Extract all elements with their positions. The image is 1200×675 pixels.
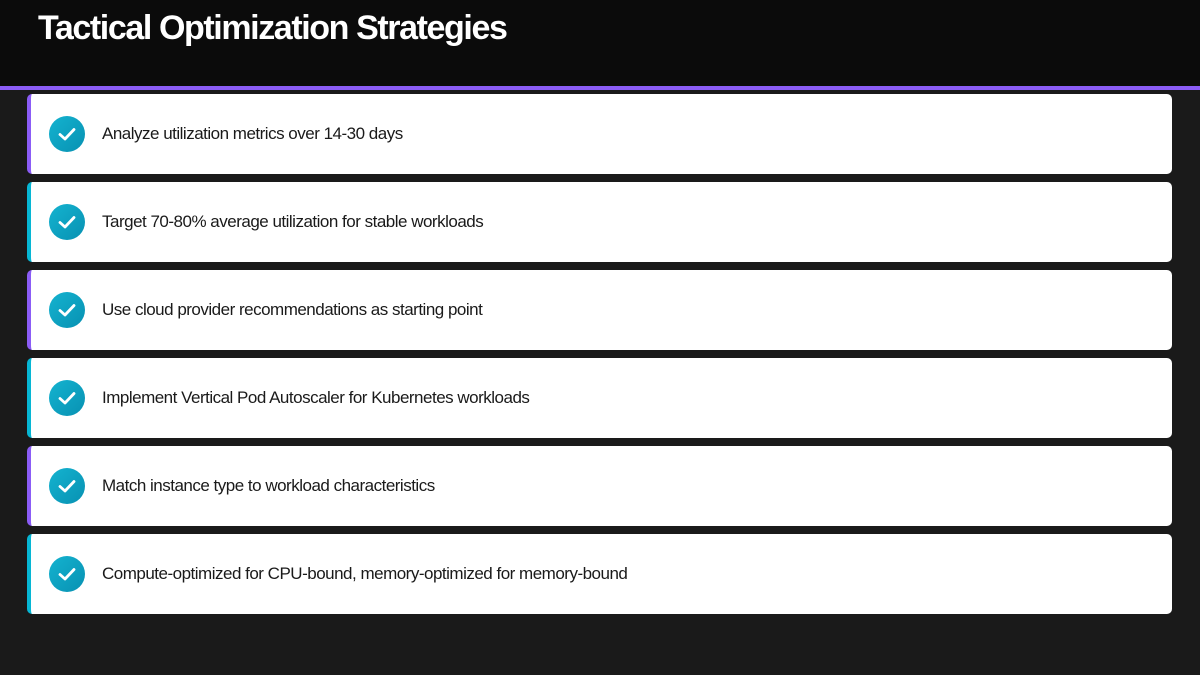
card 5: [27, 446, 1172, 526]
text: Compute-optimized for CPU-bound, memory-optimized for memory-bound: [102, 564, 627, 583]
card 4: [27, 358, 1172, 438]
icon: check: [49, 116, 85, 152]
header bar: [0, 0, 1200, 86]
icon: check: [49, 204, 85, 240]
card 6: [27, 534, 1172, 614]
text: Match instance type to workload characteristics: [102, 476, 435, 495]
icon: check: [49, 468, 85, 504]
icon: check: [49, 380, 85, 416]
card 3: [27, 270, 1172, 350]
icon: check: [49, 556, 85, 592]
text: Implement Vertical Pod Autoscaler for Kubernetes workloads: [102, 388, 529, 407]
text: Use cloud provider recommendations as starting point: [102, 300, 482, 319]
text: Target 70-80% average utilization for stable workloads: [102, 212, 483, 231]
icon: check: [49, 292, 85, 328]
card 2: [27, 182, 1172, 262]
title: Tactical Optimization Strategies: [38, 9, 506, 47]
text: Analyze utilization metrics over 14-30 days: [102, 124, 403, 143]
card 1: [27, 94, 1172, 174]
